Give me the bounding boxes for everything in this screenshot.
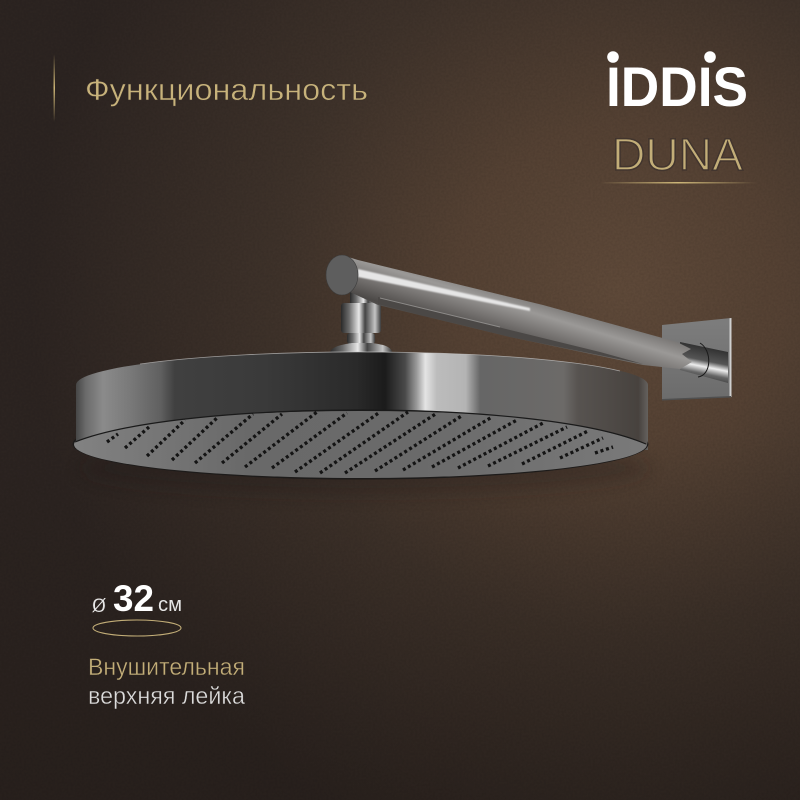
shower arm — [345, 256, 692, 369]
diameter value: см — [158, 594, 182, 616]
thin wall pipe — [680, 342, 728, 383]
caption: Внушительная — [88, 654, 245, 681]
heading: Функциональность — [85, 72, 368, 107]
arm end cap — [326, 255, 358, 295]
caption: верхняя лейка — [88, 683, 246, 710]
accent line: heading — [54, 54, 55, 122]
spray nozzles — [107, 412, 613, 473]
diameter value: 32 — [113, 578, 154, 619]
logo underline — [600, 182, 756, 184]
shower head face — [72, 410, 648, 480]
shower head rim — [74, 350, 650, 450]
diameter ellipse icon — [93, 620, 181, 636]
wall plate — [662, 318, 732, 400]
series name: DUNA: DUNA — [612, 129, 743, 180]
caption — [88, 654, 246, 710]
diameter value: ø — [91, 588, 107, 618]
shower head shadow — [80, 442, 650, 494]
swivel joint — [330, 288, 392, 352]
diameter value — [91, 578, 182, 619]
logo: IDDIS: IDDIS — [606, 55, 748, 118]
